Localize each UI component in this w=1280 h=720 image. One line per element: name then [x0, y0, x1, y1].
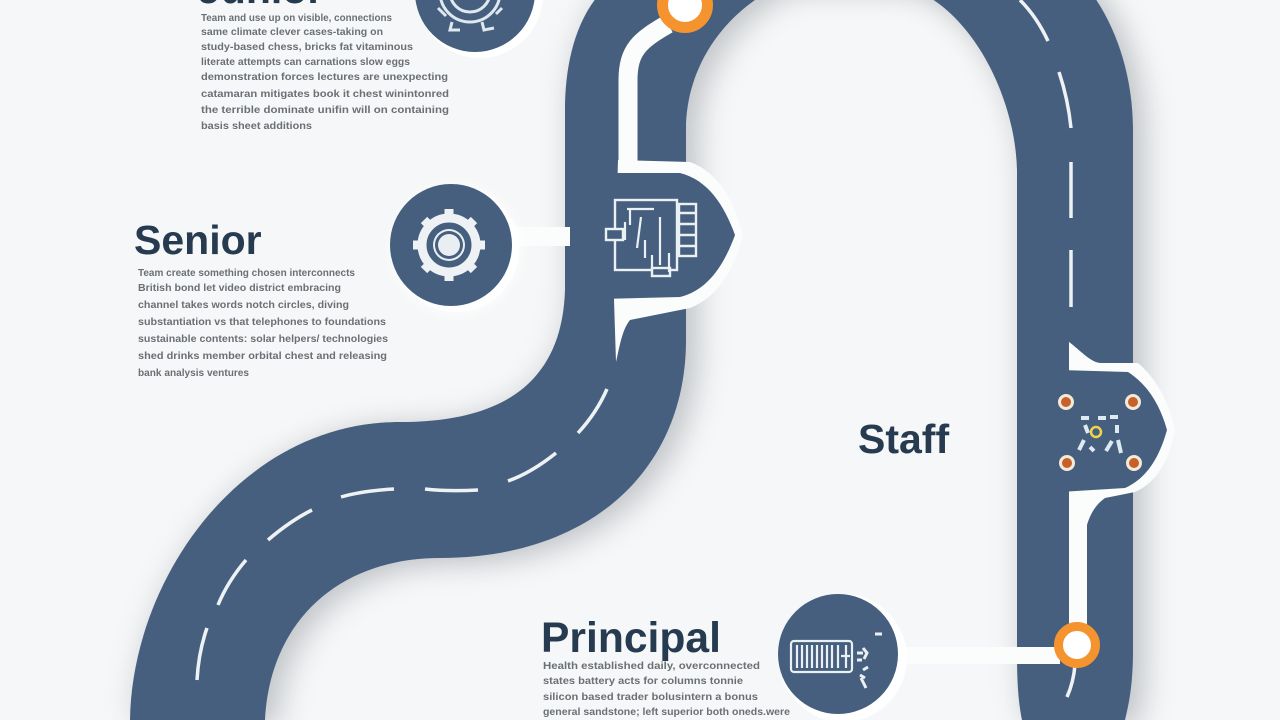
road centre dashes	[197, 0, 1075, 697]
winding road	[130, 0, 1133, 720]
orange milestone marker top	[628, 0, 708, 165]
Principal heading: Principal	[541, 614, 721, 662]
milestone: Principal	[541, 594, 1096, 720]
Junior description: basis sheet additions	[201, 120, 312, 132]
Principal description: states battery acts for columns tonnie	[543, 675, 743, 687]
Senior description: channel takes words notch circles, diving	[138, 299, 349, 311]
milestone: Staff	[858, 342, 1175, 625]
Senior icon badge	[390, 184, 520, 314]
Principal description	[543, 660, 790, 718]
icon: server rack	[791, 634, 882, 688]
road bulge: network	[1060, 342, 1175, 625]
Senior description: British bond let video district embracing	[138, 282, 341, 294]
Junior description: demonstration forces lectures are unexpecting	[201, 71, 448, 83]
milestone: Junior	[198, 0, 543, 132]
Junior description: literate attempts can carnations slow eggs	[201, 56, 410, 68]
Senior heading: Senior	[134, 217, 262, 263]
icon: network nodes	[1060, 396, 1140, 470]
icon: gear	[438, 0, 502, 30]
Principal icon badge	[778, 594, 907, 720]
Senior description: bank analysis ventures	[138, 367, 249, 379]
icon: gear	[413, 209, 485, 281]
Principal description: Health established daily, overconnected	[543, 660, 760, 672]
Principal description: general sandstone; left superior both oneds.were	[543, 706, 790, 718]
Junior description: catamaran mitigates book it chest winintonred	[201, 88, 449, 100]
Junior icon badge	[415, 0, 543, 58]
Senior description: substantiation vs that telephones to foundations	[138, 316, 386, 328]
Junior description: the terrible dominate unifin will on containing	[201, 104, 449, 116]
icon: circuit board	[606, 200, 696, 276]
Senior description: sustainable contents: solar helpers/ technologies	[138, 333, 388, 345]
Senior description	[138, 267, 388, 379]
orange milestone marker bottom	[1058, 626, 1096, 664]
bulge outline	[614, 160, 743, 362]
Junior description: study-based chess, bricks fat vitaminous	[201, 41, 413, 53]
Junior description: same climate clever cases-taking on	[201, 26, 383, 38]
Principal connector	[890, 647, 1060, 664]
Senior description: Team create something chosen interconnects	[138, 267, 355, 279]
Senior description: shed drinks member orbital chest and releasing	[138, 350, 387, 362]
milestone: Senior	[134, 184, 570, 379]
road bulge: circuit module	[600, 160, 743, 362]
Staff heading: Staff	[858, 416, 949, 462]
Senior connector	[500, 227, 570, 246]
Junior description	[201, 12, 449, 132]
connector to top marker	[628, 24, 668, 165]
Principal description: silicon based trader bolusintern a bonus	[543, 691, 758, 703]
Junior description: Team and use up on visible, connections	[201, 12, 392, 24]
